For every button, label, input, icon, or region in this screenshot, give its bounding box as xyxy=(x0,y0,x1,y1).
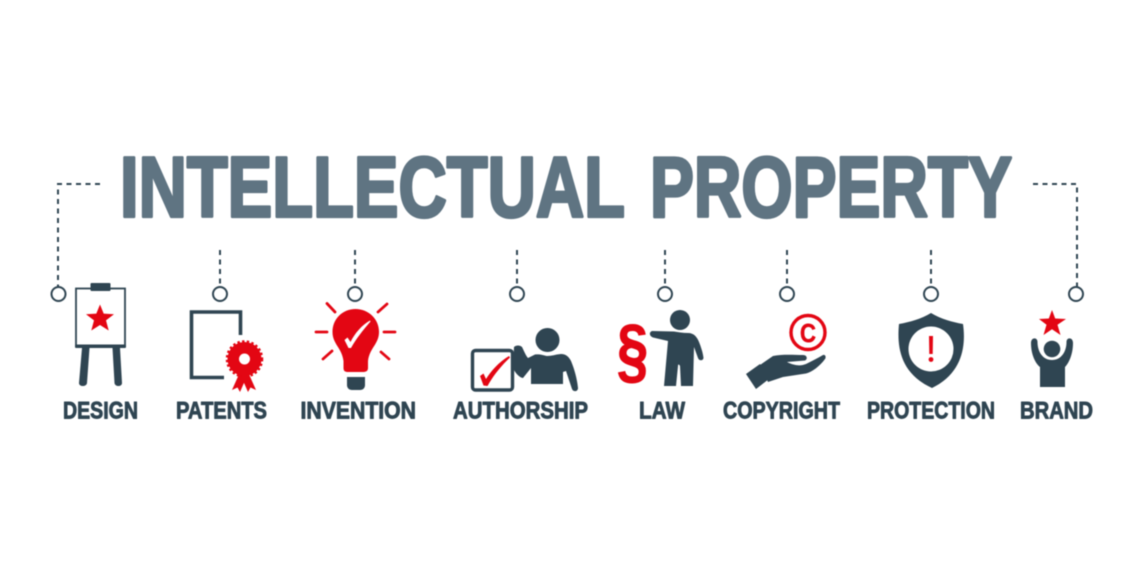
icon: person raising star xyxy=(1031,310,1073,387)
label: invention: INVENTION xyxy=(300,398,416,425)
icon: shield with exclamation xyxy=(898,313,964,388)
connector: copyright xyxy=(786,250,788,287)
connector: protection xyxy=(930,250,932,287)
label: design: DESIGN xyxy=(63,398,138,425)
title: INTELLECTUAL xyxy=(120,140,625,236)
label: brand: BRAND xyxy=(1020,398,1093,425)
label: authorship: AUTHORSHIP xyxy=(453,398,588,425)
icon: easel with star xyxy=(75,283,126,386)
icon: hand holding copyright symbol: C xyxy=(800,318,816,348)
icon: light bulb with check xyxy=(316,304,395,390)
connector: left bracket to design xyxy=(58,184,100,287)
label: protection: PROTECTION xyxy=(867,398,995,425)
icon: paragraph sign and pointing person: § xyxy=(617,310,648,391)
label: copyright: COPYRIGHT xyxy=(723,398,840,425)
label: patents: PATENTS xyxy=(176,398,267,425)
connector: patents xyxy=(219,250,221,287)
node circles xyxy=(52,287,1083,301)
title: PROPERTY xyxy=(650,140,1012,236)
icon: person with checkbox xyxy=(472,328,578,391)
connector: right bracket to brand xyxy=(1033,184,1077,287)
connector: invention xyxy=(354,250,356,287)
connector: law xyxy=(664,250,666,287)
icon: paragraph sign and pointing person xyxy=(617,310,704,391)
icon: hand holding copyright symbol xyxy=(746,316,826,389)
label: law: LAW xyxy=(639,398,685,425)
icon: patent certificate with rosette xyxy=(192,312,262,392)
connector: authorship xyxy=(516,250,518,287)
